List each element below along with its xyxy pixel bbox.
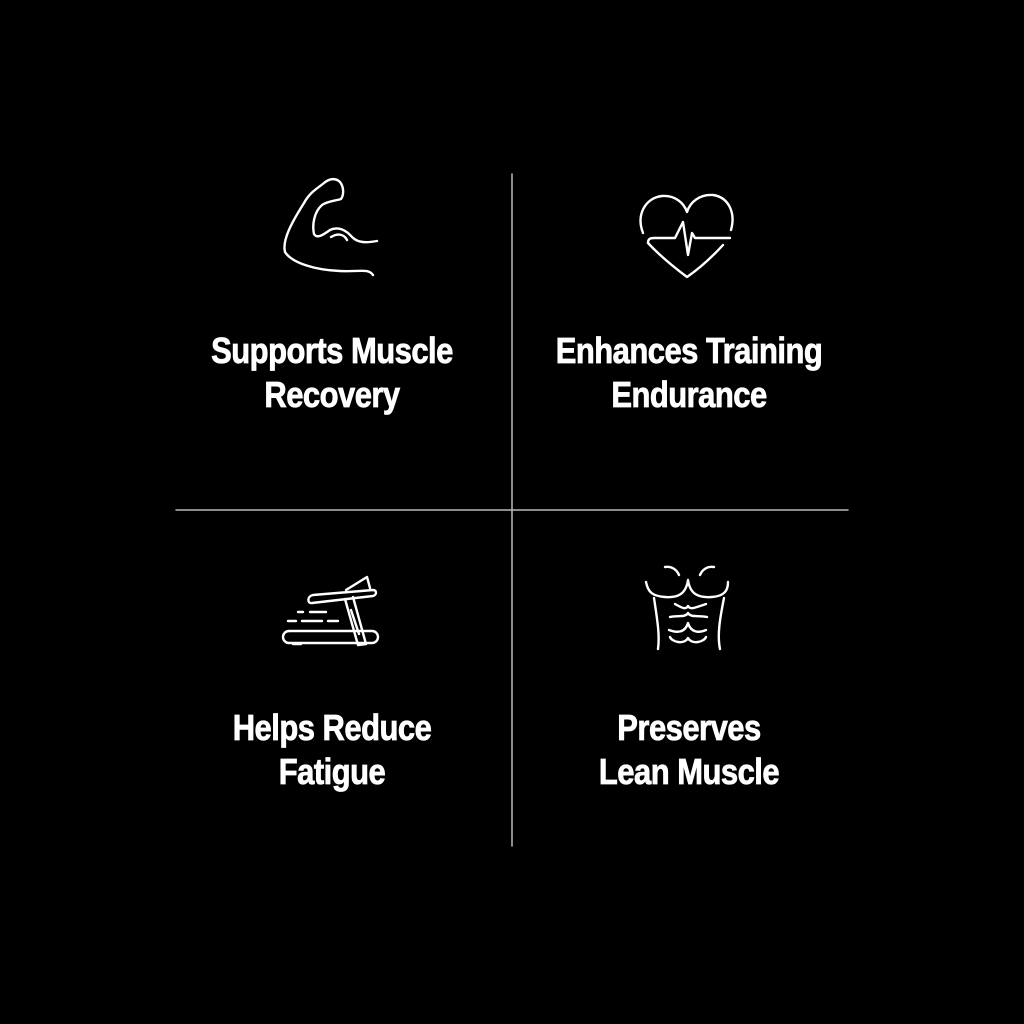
- icon: treadmill: [283, 577, 378, 645]
- text: Supports Muscle Recovery: Supports Muscle: [211, 330, 453, 371]
- text: Supports Muscle Recovery: Recovery: [264, 374, 400, 415]
- text: Helps Reduce Fatigue: [233, 707, 432, 792]
- text: Preserves Lean Muscle: Lean Muscle: [599, 751, 779, 792]
- text: Enhances Training Endurance: Endurance: [611, 374, 767, 415]
- text: Enhances Training Endurance: Enhances Training: [556, 330, 822, 371]
- text: Preserves Lean Muscle: Preserves: [617, 707, 761, 748]
- icon: flexed bicep: [284, 179, 377, 275]
- icon: heart with heartbeat: [641, 195, 732, 277]
- text: Helps Reduce Fatigue: Fatigue: [279, 751, 385, 792]
- text: Supports Muscle Recovery: [211, 330, 453, 415]
- text: Preserves Lean Muscle: [599, 707, 779, 792]
- icon: abdominal muscles: [646, 567, 728, 649]
- text: Enhances Training Endurance: [556, 330, 822, 415]
- text: Helps Reduce Fatigue: Helps Reduce: [233, 707, 431, 748]
